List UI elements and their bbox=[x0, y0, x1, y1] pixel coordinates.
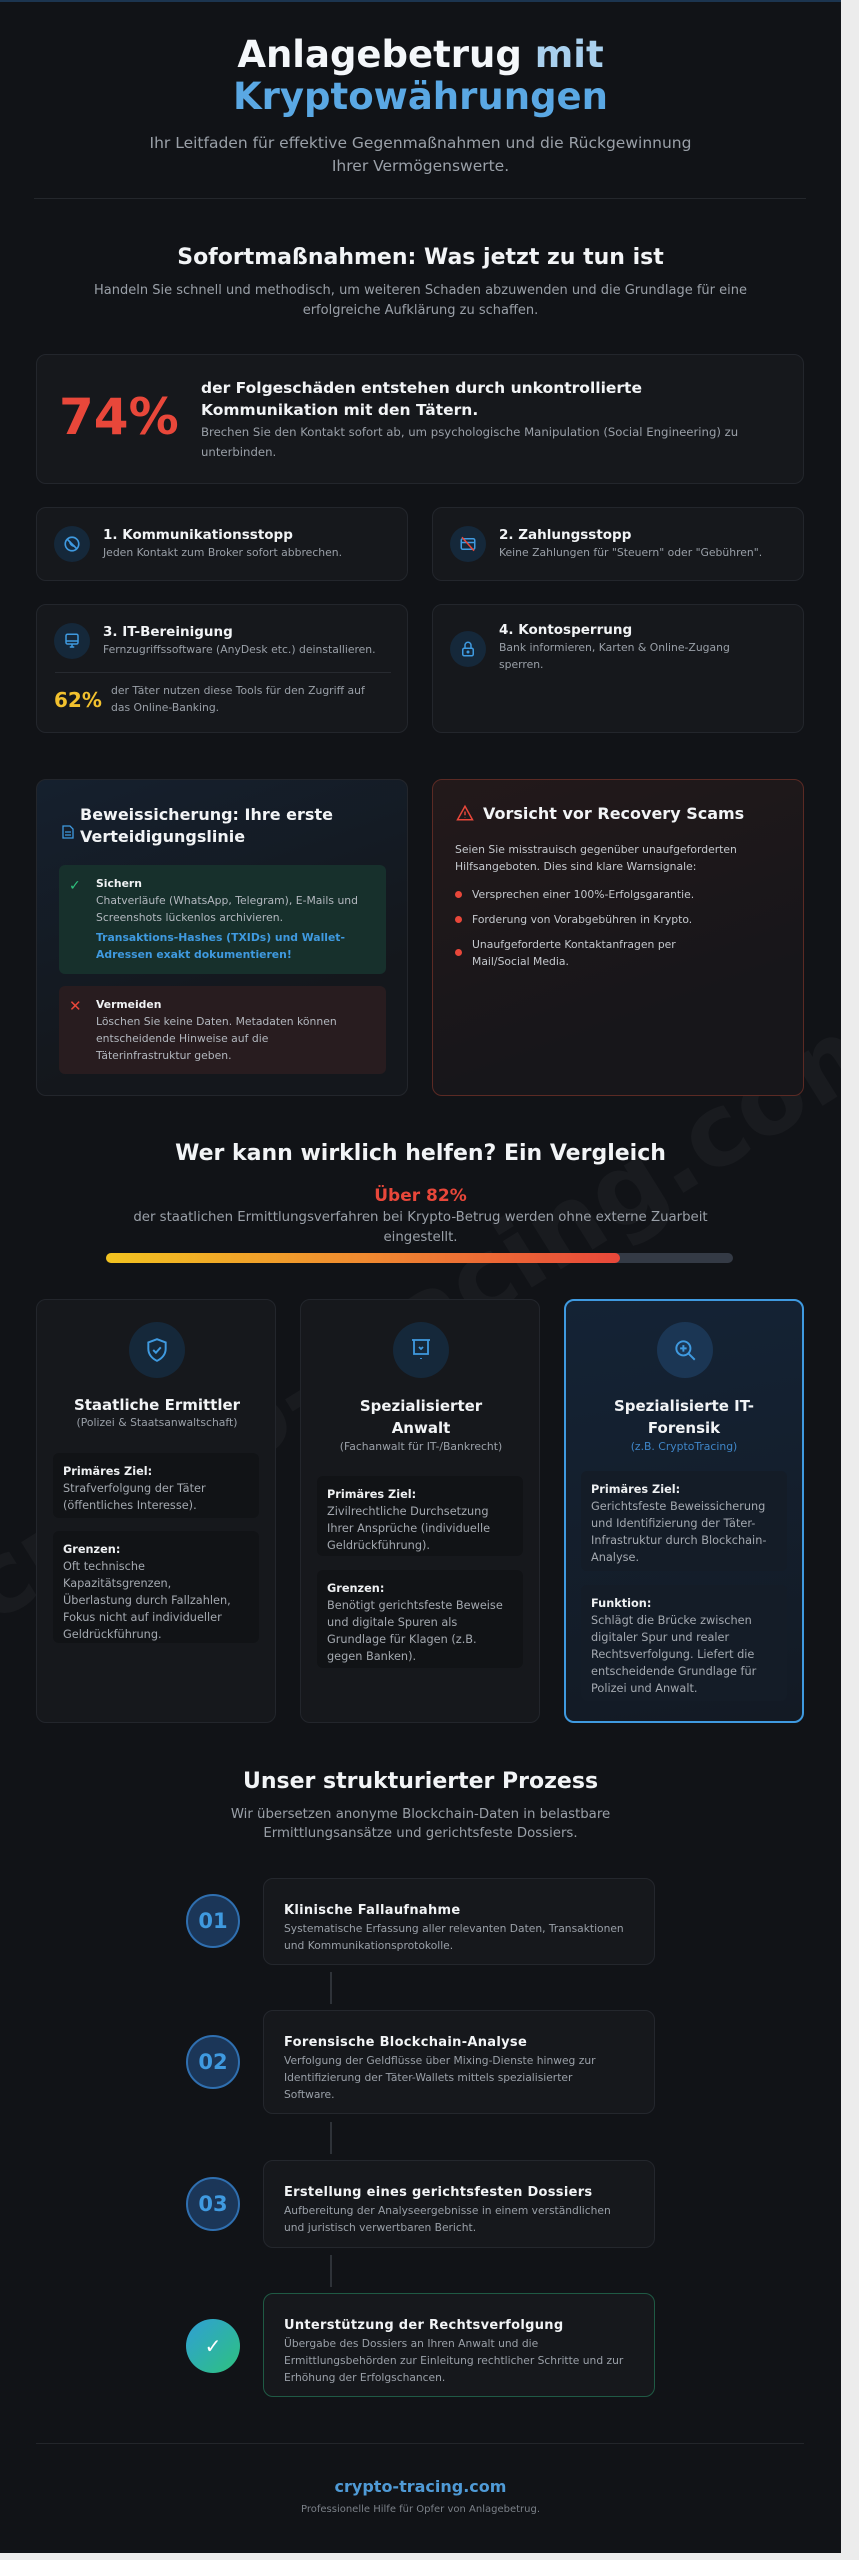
step 01: 01 bbox=[198, 1909, 228, 1933]
box: Vermeiden: Vermeiden bbox=[96, 998, 161, 1011]
card: Kontosperrung: Bank informieren, Karten & Online-Zugang sperren. bbox=[499, 641, 730, 671]
card: Zahlungsstopp: 2. Zahlungsstopp bbox=[499, 527, 631, 543]
text: Systematische Erfassung aller relevanten Daten, Transaktionen und Kommunikationsprotokolle. bbox=[284, 1922, 624, 1952]
stat text: Brechen Sie den Kontakt sofort ab, um psychologische Manipulation (Social Engineering) zu unterbinden. bbox=[201, 425, 738, 459]
panel: Recovery Scams bbox=[432, 779, 804, 1096]
card: Anwalt: (Fachanwalt für IT-/Bankrecht) bbox=[340, 1440, 502, 1453]
card: Zahlungsstopp: Keine Zahlungen für "Steuern" oder "Gebühren". bbox=[499, 546, 762, 559]
card: IT-Forensik: (z.B. CryptoTracing) bbox=[631, 1440, 737, 1453]
box: Sichern: Sichern bbox=[96, 877, 142, 890]
box: Sichern: ✓ bbox=[69, 878, 81, 894]
box: Ziel: Primäres Ziel: bbox=[63, 1465, 152, 1478]
progress bar bbox=[106, 1253, 733, 1263]
step 01 bbox=[186, 1894, 240, 1948]
box: Ziel: Zivilrechtliche Durchsetzung Ihrer Ansprüche (individuelle Geldrückführung). bbox=[327, 1505, 490, 1552]
card: Kommunikationsstopp: 1. Kommunikationsstopp bbox=[103, 527, 293, 543]
connectors bbox=[330, 1972, 332, 2004]
subtitle: Ihr Leitfaden für effektive Gegenmaßnahmen und die Rückgewinnung Ihrer Vermögenswerte. bbox=[150, 134, 691, 175]
stat: Über 82%: Über 82% bbox=[374, 1186, 467, 1206]
step 04 check bbox=[186, 2319, 240, 2373]
icon: presentation bbox=[393, 1322, 449, 1378]
card: IT-Bereinigung bbox=[36, 604, 408, 733]
box: Ziel: Primäres Ziel: bbox=[327, 1488, 416, 1501]
card: Staatliche Ermittler: Staatliche Ermittler bbox=[74, 1396, 240, 1414]
icon: monitor bbox=[54, 623, 90, 659]
card: IT-Bereinigung: der Täter nutzen diese Tools für den Zugriff auf das Online-Banking. bbox=[111, 684, 365, 714]
box: Sichern: Transaktions-Hashes (TXIDs) und Wallet-Adressen exakt dokumentieren! bbox=[96, 931, 345, 961]
card: Zahlungsstopp bbox=[432, 507, 804, 581]
box: Ziel: Gerichtsfeste Beweissicherung und Identifizierung der Täter-Infrastruktur durch Blockchain-Analyse. bbox=[591, 1500, 766, 1564]
card: Kontosperrung: 4. Kontosperrung bbox=[499, 622, 632, 638]
box: Vermeiden: ✕ bbox=[69, 997, 82, 1015]
card: IT-Forensik: Spezialisierte IT- bbox=[614, 1397, 754, 1415]
card: IT-Bereinigung: Fernzugriffssoftware (AnyDesk etc.) deinstallieren. bbox=[103, 643, 376, 656]
bullet list bbox=[455, 888, 694, 968]
card: Anwalt: Spezialisierter bbox=[360, 1397, 482, 1415]
icon: lock bbox=[450, 631, 486, 667]
text: Seien Sie misstrauisch gegenüber unaufgeforderten Hilfsangeboten. Dies sind klare Warnsignale: bbox=[455, 843, 737, 873]
text: Übergabe des Dossiers an Ihren Anwalt und die Ermittlungsbehörden zur Einleitung rechtlicher Schritte und zur Erhöhung der Erfolgschancen. bbox=[284, 2337, 623, 2384]
card: Anwalt bbox=[300, 1299, 540, 1723]
heading: Beweissicherung: Ihre erste Verteidigungslinie bbox=[80, 805, 333, 846]
footer: Professionelle Hilfe für Opfer von Anlagebetrug. bbox=[301, 2504, 540, 2515]
card: Kommunikationsstopp: Jeden Kontakt zum Broker sofort abbrechen. bbox=[103, 546, 342, 559]
icon: card crossed bbox=[450, 526, 486, 562]
step 03 bbox=[186, 2177, 240, 2231]
bullet list: Unaufgeforderte Kontaktanfragen per Mail/Social Media. bbox=[472, 938, 676, 968]
card: Staatliche Ermittler: (Polizei & Staatsanwaltschaft) bbox=[77, 1416, 237, 1429]
heading: Sofortmaßnahmen: Sofortmaßnahmen: Was jetzt zu tun ist bbox=[177, 245, 664, 270]
box: Sichern bbox=[59, 865, 386, 974]
title: Anlagebetrug mit bbox=[237, 33, 604, 76]
icon: magnifier bbox=[657, 1322, 713, 1378]
card: IT-Bereinigung: 3. IT-Bereinigung bbox=[103, 624, 233, 640]
card: Staatliche Ermittler bbox=[36, 1299, 276, 1723]
heading: Vergleich: Wer kann wirklich helfen? Ein Vergleich bbox=[175, 1141, 666, 1166]
bullet list: Forderung von Vorabgebühren in Krypto. bbox=[472, 913, 692, 926]
heading: Vorsicht vor Recovery Scams bbox=[483, 804, 744, 823]
stat number: 74% bbox=[59, 388, 179, 446]
text: Erstellung eines gerichtsfesten Dossiers bbox=[284, 2185, 592, 2200]
step 04 check: ✓ bbox=[205, 2334, 221, 2358]
stat 62%: 62% bbox=[54, 688, 102, 712]
text: intro: Handeln Sie schnell und methodisch, um weiteren Schaden abzuwenden und die Grundlage für eine erfolgreiche Aufklärung zu schaffen. bbox=[94, 283, 747, 318]
text: Klinische Fallaufnahme bbox=[284, 1903, 460, 1918]
card: IT-Forensik: Forensik bbox=[648, 1419, 720, 1437]
box: Grenzen: Oft technische bbox=[63, 1560, 145, 1573]
box: Ziel: Strafverfolgung der Täter (öffentliches Interesse). bbox=[63, 1482, 206, 1512]
step 02: 02 bbox=[198, 2050, 228, 2074]
title: Kryptowährungen bbox=[233, 75, 608, 118]
title bbox=[233, 33, 608, 118]
box: Grenzen: Grenzen: bbox=[63, 1543, 120, 1556]
text: Wir übersetzen anonyme Blockchain-Daten in belastbare Ermittlungsansätze und gerichtsfeste Dossiers. bbox=[231, 1807, 610, 1841]
box: Funktion: Funktion: bbox=[591, 1597, 651, 1610]
box: Vermeiden bbox=[59, 986, 386, 1074]
panel: Beweissicherung bbox=[36, 779, 408, 1096]
box: Ziel bbox=[581, 1471, 787, 1571]
text: Verfolgung der Geldflüsse über Mixing-Dienste hinweg zur Identifizierung der Täter-Wallets mittels spezialisierter Software. bbox=[284, 2054, 596, 2101]
step 03: 03 bbox=[198, 2192, 228, 2216]
heading: Prozess: Unser strukturierter Prozess bbox=[243, 1769, 598, 1794]
box: Grenzen: Grenzen: bbox=[327, 1582, 384, 1595]
box: Funktion: Schlägt die Brücke zwischen digitaler Spur und realer Rechtsverfolgung. Liefert die entscheidende Grundlage für Polizei und Anwalt. bbox=[591, 1614, 756, 1695]
box: Ziel: Primäres Ziel: bbox=[591, 1483, 680, 1496]
box: Grenzen: Kapazitätsgrenzen, Überlastung durch Fallzahlen, Fokus nicht auf individueller Geldrückführung. bbox=[63, 1577, 231, 1641]
text: Unterstützung der Rechtsverfolgung bbox=[284, 2318, 563, 2333]
box: Grenzen bbox=[317, 1570, 523, 1668]
text: Aufbereitung der Analyseergebnisse in einem verständlichen und juristisch verwertbaren Bericht. bbox=[284, 2204, 611, 2234]
text: Forensische Blockchain-Analyse bbox=[284, 2035, 527, 2050]
stat card 74% bbox=[36, 354, 804, 484]
step 02 bbox=[186, 2035, 240, 2089]
box: Ziel bbox=[317, 1476, 523, 1556]
box: Grenzen: Benötigt gerichtsfeste Beweise und digitale Spuren als Grundlage für Klagen (z.B. gegen Banken). bbox=[327, 1599, 503, 1663]
icon: warning bbox=[456, 804, 474, 820]
stat text: der Folgeschäden entstehen durch unkontrollierte Kommunikation mit den Tätern. bbox=[201, 379, 642, 419]
card: IT-Forensik bbox=[564, 1299, 804, 1723]
box: Funktion bbox=[581, 1585, 787, 1701]
card: Anwalt: Anwalt bbox=[392, 1419, 450, 1437]
box: Vermeiden: Löschen Sie keine Daten. Metadaten können entscheidende Hinweise auf die Täterinfrastruktur geben. bbox=[96, 1015, 337, 1062]
icon: shield bbox=[129, 1322, 185, 1378]
card: Kommunikationsstopp bbox=[36, 507, 408, 581]
footer bbox=[301, 2477, 540, 2515]
bullet list: Versprechen einer 100%-Erfolgsgarantie. bbox=[472, 888, 694, 901]
icon: document bbox=[62, 825, 74, 839]
text: der staatlichen Ermittlungsverfahren bei Krypto-Betrug werden ohne externe Zuarbeit eingestellt. bbox=[133, 1210, 708, 1245]
box: Ziel bbox=[53, 1453, 259, 1518]
icon: no phone bbox=[54, 526, 90, 562]
stat text bbox=[201, 379, 738, 459]
footer: crypto-tracing.com bbox=[335, 2477, 506, 2496]
box: Sichern: Chatverläufe (WhatsApp, Telegram), E-Mails und Screenshots lückenlos archivieren. bbox=[96, 894, 358, 924]
box: Grenzen bbox=[53, 1531, 259, 1643]
card: Kontosperrung bbox=[432, 604, 804, 733]
